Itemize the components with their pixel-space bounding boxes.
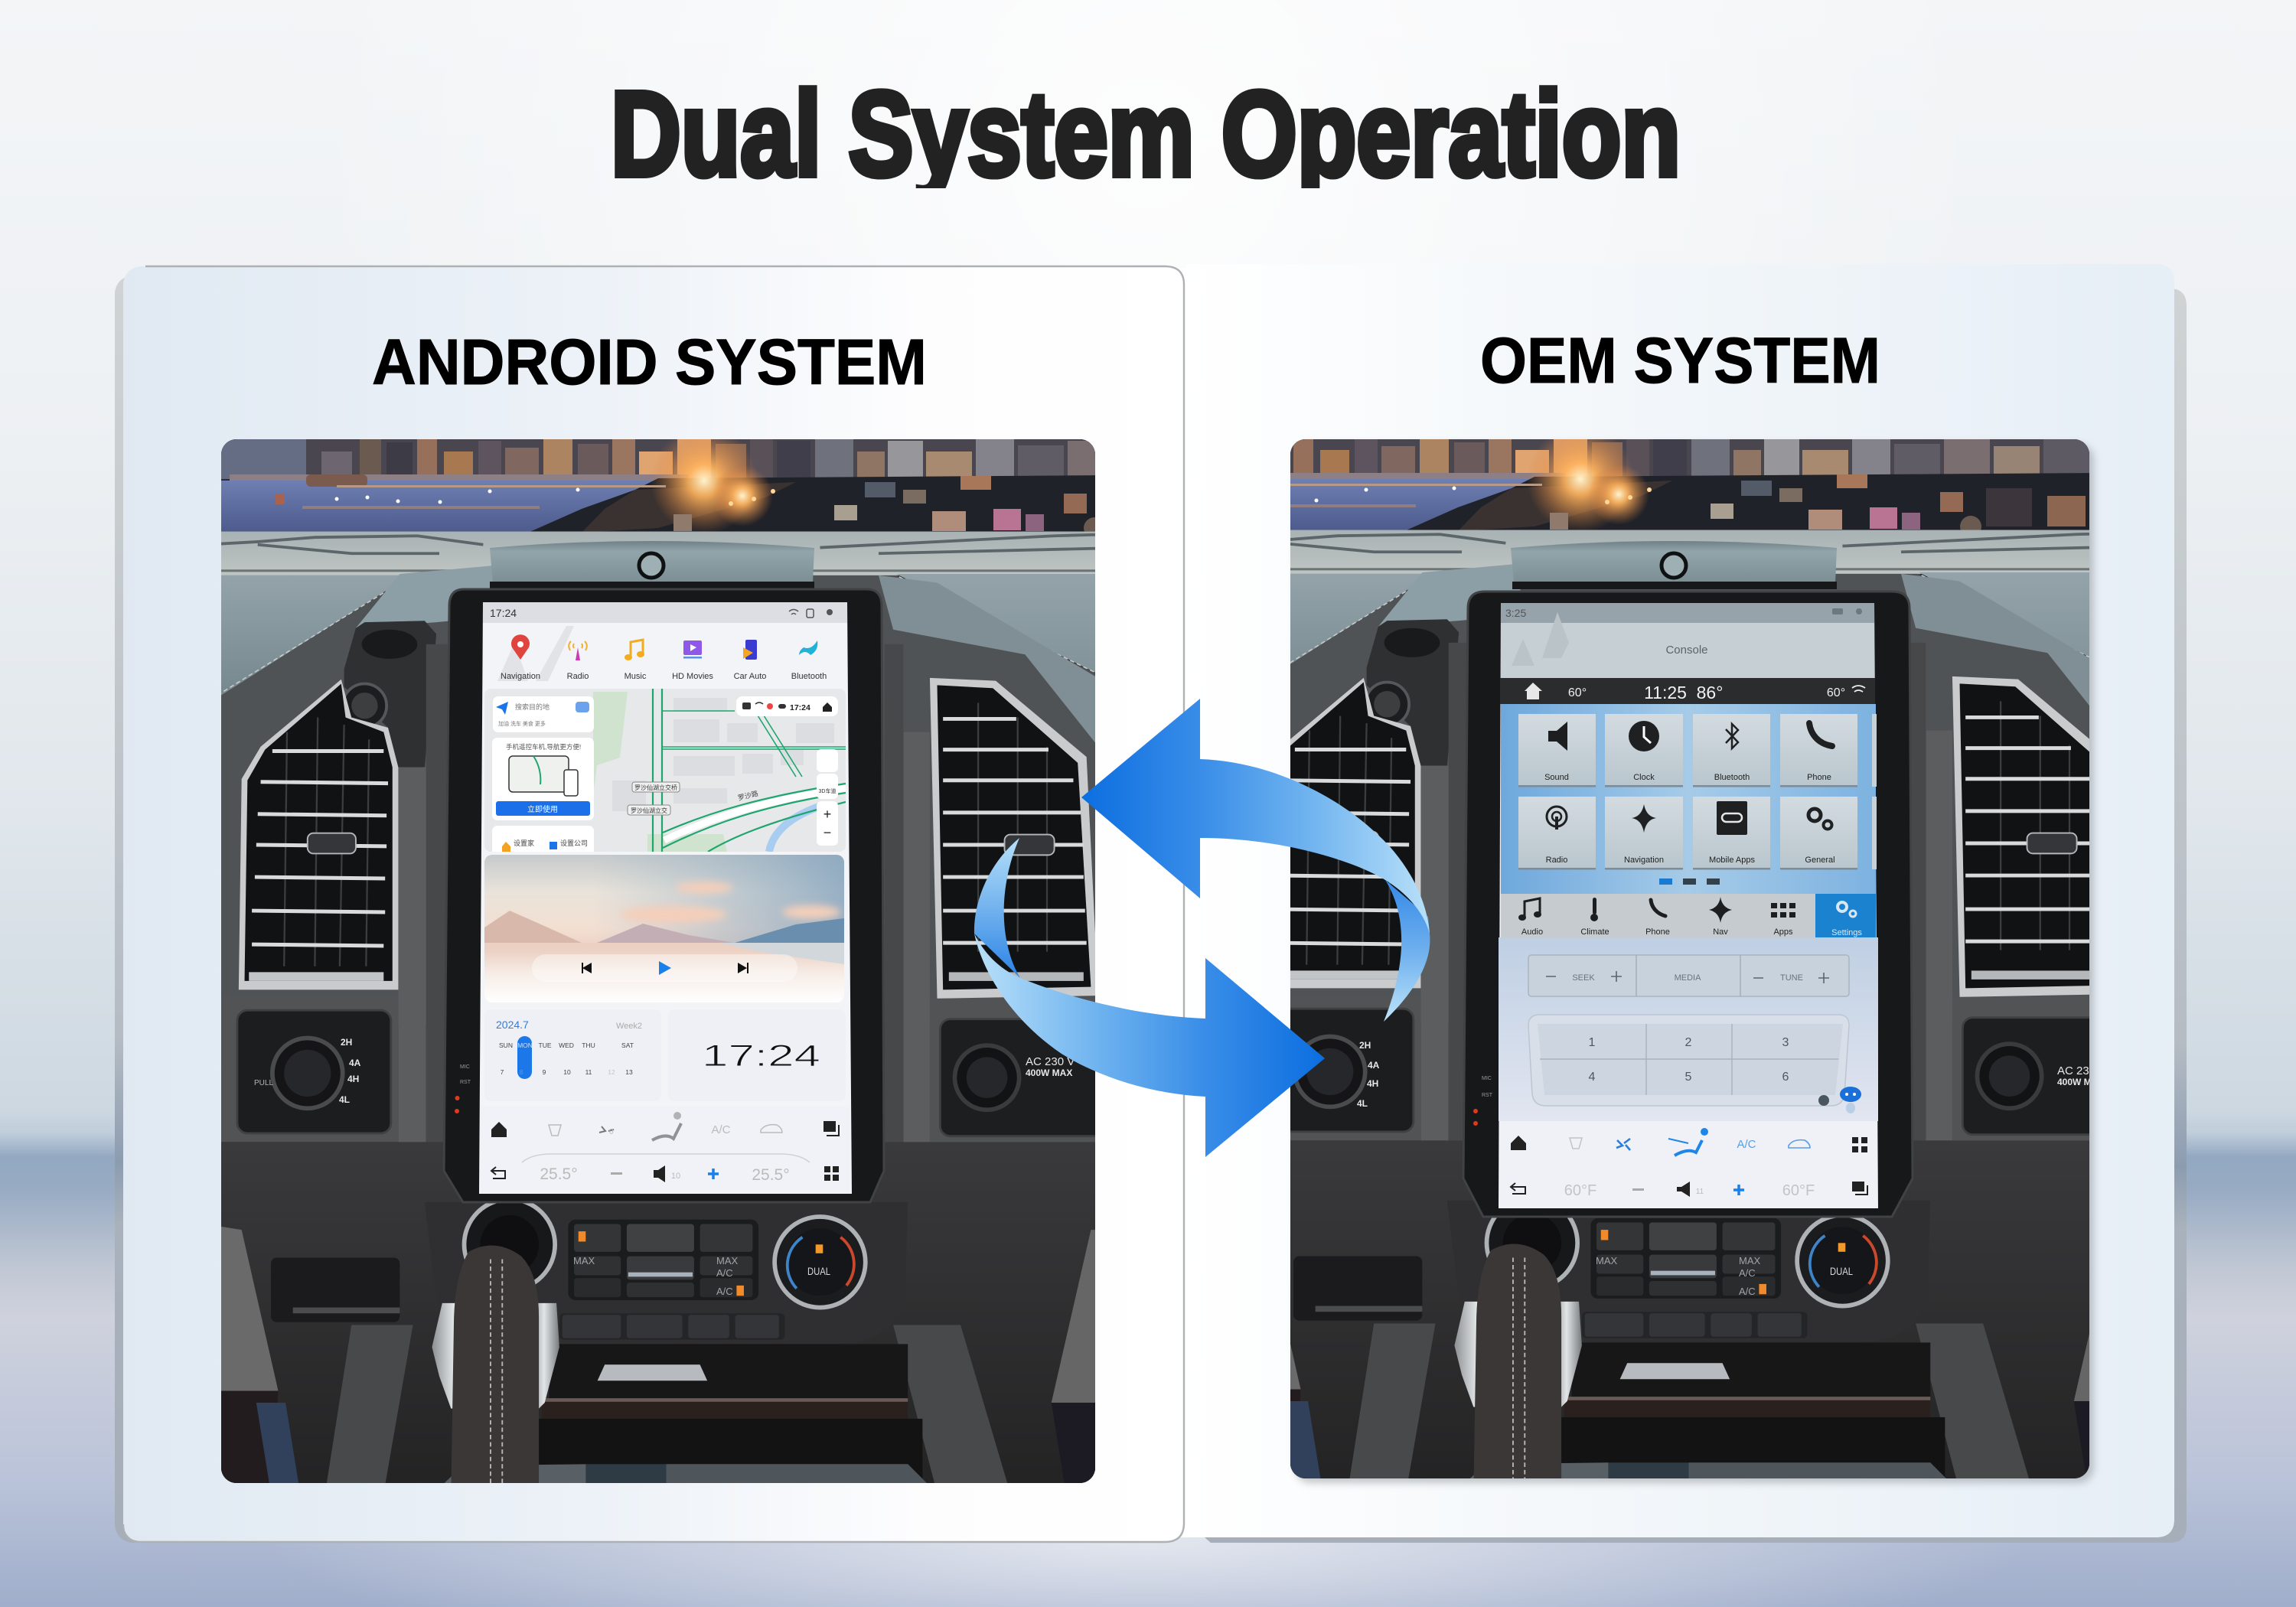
oem tab bar: Apps xyxy=(1773,927,1793,937)
climate and nav bar xyxy=(1511,1128,1867,1199)
status bar xyxy=(483,602,847,623)
dashboard control labels: MAX xyxy=(1596,1255,1618,1266)
icon: app grid xyxy=(824,1166,839,1181)
dashboard control labels: MAX xyxy=(573,1255,595,1266)
panel: oem system xyxy=(1091,264,2281,1543)
dashboard control labels: DUAL xyxy=(1830,1265,1853,1277)
dashboard control labels xyxy=(1357,1040,2106,1297)
promo card: 立即使用 xyxy=(527,804,558,814)
dashboard control labels: A/C xyxy=(716,1286,733,1297)
shortcut card xyxy=(492,826,594,856)
preset buttons: 4 xyxy=(1589,1071,1596,1084)
calendar card: THU xyxy=(582,1041,595,1049)
calendar card: 12 xyxy=(608,1068,615,1076)
shortcut card: 设置家 xyxy=(514,839,534,847)
tile: mobile apps: Mobile Apps xyxy=(1709,856,1755,865)
oem tab bar: Audio xyxy=(1521,927,1543,937)
status LEDs: RST xyxy=(1482,1093,1493,1098)
clock card xyxy=(668,1009,846,1101)
promo card xyxy=(492,738,594,820)
dashboard control labels: AC 230 V xyxy=(1026,1055,1075,1068)
preset buttons xyxy=(1528,1015,1849,1106)
calendar card: 7 xyxy=(501,1068,504,1076)
search card: 搜索目的地 xyxy=(515,702,550,711)
dashboard control labels xyxy=(254,1037,1075,1297)
climate and nav bar: 10 xyxy=(671,1172,680,1181)
central white gap xyxy=(1171,268,1225,1537)
calendar card: SAT xyxy=(621,1041,634,1049)
seek media tune bar: SEEK xyxy=(1572,973,1595,983)
photo shadow xyxy=(1295,444,2094,1483)
icon: music xyxy=(625,640,644,660)
icon: seat xyxy=(652,1123,681,1140)
map labels xyxy=(628,782,759,815)
app row: Music xyxy=(625,672,647,681)
arrow: oem to android xyxy=(1081,699,1430,1022)
tile: bluetooth xyxy=(1693,714,1770,787)
climate and nav bar: 0 xyxy=(609,1128,614,1136)
icon: car auto xyxy=(743,640,757,660)
icon: home xyxy=(491,1122,507,1137)
assistant robot xyxy=(1818,1087,1861,1113)
tile: radio: Radio xyxy=(1546,856,1567,865)
climate and nav bar: A/C xyxy=(711,1123,731,1136)
calendar card: WED xyxy=(559,1041,574,1049)
dashboard control labels: 4L xyxy=(339,1094,350,1105)
status LEDs xyxy=(455,1064,471,1113)
dashboard control labels: MAX xyxy=(716,1255,738,1266)
map side buttons: 3D车道 xyxy=(819,787,836,794)
map labels: 罗沙仙湖立交 xyxy=(631,807,667,814)
heading: android system: ANDROID SYSTEM xyxy=(372,326,927,398)
calendar card: 9 xyxy=(543,1068,546,1076)
app row: HD Movies xyxy=(672,672,713,681)
heading: oem system: OEM SYSTEM xyxy=(1480,324,1880,396)
clock card: 17:24 xyxy=(702,1039,820,1073)
status LEDs: RST xyxy=(460,1080,471,1085)
dashboard control labels: 4H xyxy=(347,1074,359,1084)
icon: bluetooth xyxy=(799,641,817,655)
tile: navigation: Navigation xyxy=(1624,856,1664,865)
dashboard control labels: MAX xyxy=(1739,1255,1760,1266)
panel backing edge xyxy=(1205,288,2187,1543)
wallpaper media card xyxy=(484,855,844,1002)
dashboard control labels: 4A xyxy=(1368,1060,1380,1071)
dashboard control labels: 400W MAX xyxy=(1026,1068,1072,1078)
info bar: 60° xyxy=(1568,686,1587,699)
screen bezel xyxy=(1463,592,1913,1217)
tile: general xyxy=(1780,797,1857,869)
arrow: android to oem xyxy=(974,838,1325,1157)
calendar card xyxy=(484,1009,661,1101)
dashboard control labels: A/C xyxy=(1739,1267,1756,1279)
info bar xyxy=(1500,678,1875,704)
tile: general: General xyxy=(1805,856,1835,865)
climate and nav bar: 60°F xyxy=(1782,1182,1815,1199)
info bar: 86° xyxy=(1697,683,1723,702)
status bar: 3:25 xyxy=(1505,607,1526,619)
shortcut card: 设置公司 xyxy=(560,839,588,847)
dashboard control labels: DUAL xyxy=(807,1265,830,1277)
app row: Radio xyxy=(567,672,589,681)
icon: navigation xyxy=(511,634,530,660)
climate and nav bar xyxy=(481,1106,850,1194)
calendar card: 11 xyxy=(585,1068,592,1076)
android screen xyxy=(479,602,852,1194)
preset buttons: 3 xyxy=(1782,1036,1789,1049)
dashboard control labels: 2H xyxy=(341,1037,352,1048)
map labels: 罗沙仙湖立交桥 xyxy=(634,784,677,791)
search card xyxy=(493,696,594,732)
settings tile grid xyxy=(1501,704,1877,894)
status bar: 17:24 xyxy=(490,607,517,619)
dashboard control labels: 2H xyxy=(1359,1040,1371,1051)
page dots xyxy=(1659,878,1720,885)
info bar: 60° xyxy=(1827,686,1845,699)
media controls xyxy=(532,954,797,982)
tile: bluetooth: Bluetooth xyxy=(1714,773,1750,782)
calendar card: 13 xyxy=(625,1068,633,1076)
map side buttons xyxy=(817,749,838,846)
status LEDs: MIC xyxy=(460,1064,470,1070)
photo: oem screen in dashboard xyxy=(1091,425,2281,1496)
oem tab bar: Phone xyxy=(1645,927,1670,937)
arrow back ribbon xyxy=(974,838,1020,978)
map status pill xyxy=(736,696,838,716)
oem tab bar xyxy=(1501,894,1876,937)
media control area xyxy=(1499,937,1878,1121)
preset buttons: 5 xyxy=(1685,1071,1692,1084)
calendar card: TUE xyxy=(539,1041,552,1049)
preset buttons: 1 xyxy=(1589,1036,1596,1049)
search card: 加油 洗车 美食 更多 xyxy=(498,720,546,727)
arrow body xyxy=(974,934,1325,1157)
tile: phone xyxy=(1780,714,1857,787)
preset buttons: 2 xyxy=(1685,1036,1692,1049)
map widget xyxy=(484,689,846,856)
calendar card: 10 xyxy=(563,1068,571,1076)
climate and nav bar: 25.5° xyxy=(540,1165,578,1183)
panel edge line xyxy=(123,266,1184,1542)
icon: windows xyxy=(823,1121,839,1136)
seek media tune bar xyxy=(1528,955,1849,996)
climate and nav bar: 25.5° xyxy=(752,1166,790,1184)
tile: navigation xyxy=(1605,797,1683,869)
tile: phone: Phone xyxy=(1807,773,1831,782)
calendar card: MON xyxy=(517,1041,533,1049)
title: Dual System Operation xyxy=(611,67,1681,201)
panel: android system xyxy=(115,266,1259,1543)
dashboard control labels: A/C xyxy=(1739,1286,1756,1297)
info bar: 11:25 xyxy=(1644,683,1687,702)
calendar card: Week2 xyxy=(616,1022,642,1031)
top speaker with logo xyxy=(1511,541,1837,589)
map labels: 罗沙路 xyxy=(737,789,759,802)
tile: clock xyxy=(1605,714,1683,787)
console bar: Console xyxy=(1665,644,1708,657)
status bar xyxy=(1501,603,1874,623)
tile: sound: Sound xyxy=(1544,773,1569,782)
oem screen xyxy=(1499,603,1878,1208)
dashboard control labels: A/C xyxy=(716,1267,733,1279)
arrow body xyxy=(1081,699,1430,934)
status LEDs: MIC xyxy=(1482,1076,1492,1081)
climate and nav bar: 60°F xyxy=(1564,1182,1596,1199)
map status pill: 17:24 xyxy=(790,703,810,712)
console bar xyxy=(1501,612,1874,678)
dashboard control labels: 4A xyxy=(349,1058,361,1068)
panel card xyxy=(1186,264,2174,1537)
tile: clock: Clock xyxy=(1633,773,1655,782)
dashboard control labels: 400W MAX xyxy=(2057,1077,2104,1087)
dashboard control labels: 4H xyxy=(1367,1078,1378,1089)
oem tab bar: Settings xyxy=(1831,928,1862,937)
status LEDs xyxy=(1473,1076,1493,1126)
dashboard control labels: AC 230 V xyxy=(2057,1064,2106,1077)
climate and nav bar: A/C xyxy=(1737,1138,1756,1151)
map side buttons: + xyxy=(823,807,831,822)
tile: sound xyxy=(1518,714,1596,787)
icon: seat blue xyxy=(1668,1139,1702,1156)
app row: Car Auto xyxy=(734,672,766,681)
seek media tune bar: MEDIA xyxy=(1675,973,1701,983)
tile: mobile apps xyxy=(1693,797,1770,869)
calendar card: 2024.7 xyxy=(496,1019,529,1031)
calendar card: SUN xyxy=(499,1041,513,1049)
oem tab bar: Climate xyxy=(1580,927,1609,937)
dashboard control labels: 4L xyxy=(1357,1098,1368,1109)
icon: radio xyxy=(569,641,587,660)
promo card: 手机遥控车机,导航更方便! xyxy=(506,743,581,751)
dashboard control labels: PULL xyxy=(254,1079,273,1087)
map side buttons: − xyxy=(823,825,831,840)
panel card xyxy=(123,266,1184,1542)
screen bezel xyxy=(444,589,884,1202)
watermark xyxy=(497,626,574,681)
top speaker with logo xyxy=(490,541,814,588)
tile: radio xyxy=(1518,797,1596,869)
panel backing edge xyxy=(115,275,161,1543)
oem tab bar: Nav xyxy=(1713,927,1728,937)
arrow back ribbon xyxy=(1384,880,1430,1022)
calendar card: 8 xyxy=(520,1068,523,1076)
photo: android head unit in dashboard xyxy=(221,439,1095,1483)
app row: Navigation xyxy=(501,672,540,681)
icon: movies xyxy=(683,641,702,658)
app row: Bluetooth xyxy=(791,672,827,681)
climate and nav bar: 11 xyxy=(1696,1188,1704,1196)
preset buttons: 6 xyxy=(1782,1071,1789,1084)
app row xyxy=(501,634,827,681)
seek media tune bar: TUNE xyxy=(1780,973,1803,983)
